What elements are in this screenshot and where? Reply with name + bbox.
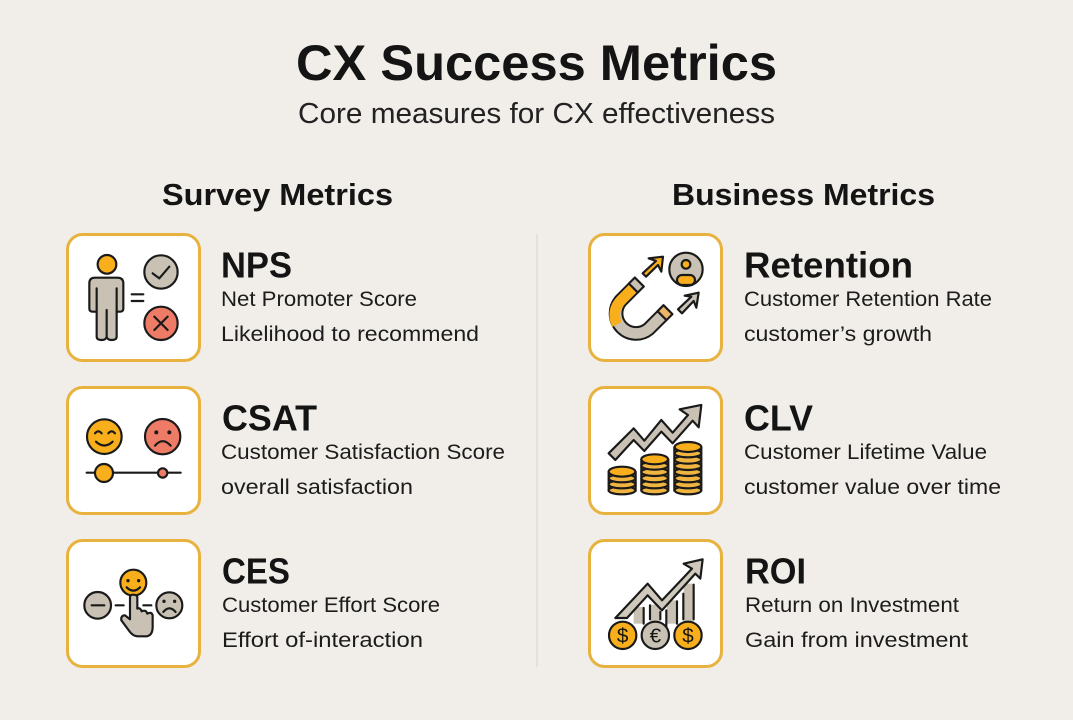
panel: NPS [68, 234, 479, 360]
description: NPS: Net Promoter Score [221, 287, 417, 311]
metric name: CSAT: CSAT [222, 398, 317, 438]
description: Retention [744, 287, 992, 346]
metric name: Retention: Retention [744, 244, 913, 286]
panel: CLV [590, 388, 1001, 514]
heading: business metrics: Business Metrics [672, 177, 935, 212]
description: CSAT: overall satisfaction [221, 475, 413, 499]
description: CSAT: Customer Satisfaction Score [221, 440, 505, 464]
description: CLV: customer value over time [744, 475, 1001, 499]
description: Retention: Customer Retention Rate [744, 287, 992, 311]
metric name: NPS: NPS [221, 244, 292, 286]
description: NPS: Likelihood to recommend [221, 322, 479, 346]
description: NPS [221, 287, 479, 346]
description: CES: Effort of-interaction [222, 628, 423, 652]
description: CES: Customer Effort Score [222, 593, 440, 617]
icon: rising arrow, bars and currency coins: € [650, 625, 662, 648]
icon: rising arrow, bars and currency coins: $ [682, 625, 694, 648]
description: Retention: customer’s growth [744, 322, 932, 346]
heading: survey metrics: Survey Metrics [162, 177, 393, 212]
panel: CES [68, 540, 440, 666]
description: ROI: Return on Investment [745, 593, 959, 617]
icon: rising arrow, bars and currency coins [609, 559, 703, 649]
metric name: CES: CES [222, 550, 290, 592]
description: ROI: Gain from investment [745, 628, 968, 652]
description: CLV [744, 440, 1001, 499]
icon: magnet attracting customer [615, 253, 703, 333]
description: CES [222, 593, 440, 652]
icon: happy and sad faces with slider [87, 419, 181, 482]
subtitle: Core measures for CX effectiveness [298, 98, 775, 130]
metric name: ROI: ROI [745, 550, 806, 592]
icon: rising arrow, bars and currency coins: $ [617, 625, 629, 648]
icon: person with check and cross [89, 255, 178, 340]
metric name: CLV: CLV [744, 398, 814, 438]
icon: faces with pointing hand [84, 570, 182, 636]
panel: Retention [590, 234, 992, 360]
panel: CSAT [68, 388, 505, 514]
panel: ROI [590, 540, 968, 666]
description: CSAT [221, 440, 505, 499]
icon: rising arrow over coin stacks [609, 405, 701, 494]
description: CLV: Customer Lifetime Value [744, 440, 987, 464]
description: ROI [745, 593, 968, 652]
title: CX Success Metrics [296, 35, 777, 91]
